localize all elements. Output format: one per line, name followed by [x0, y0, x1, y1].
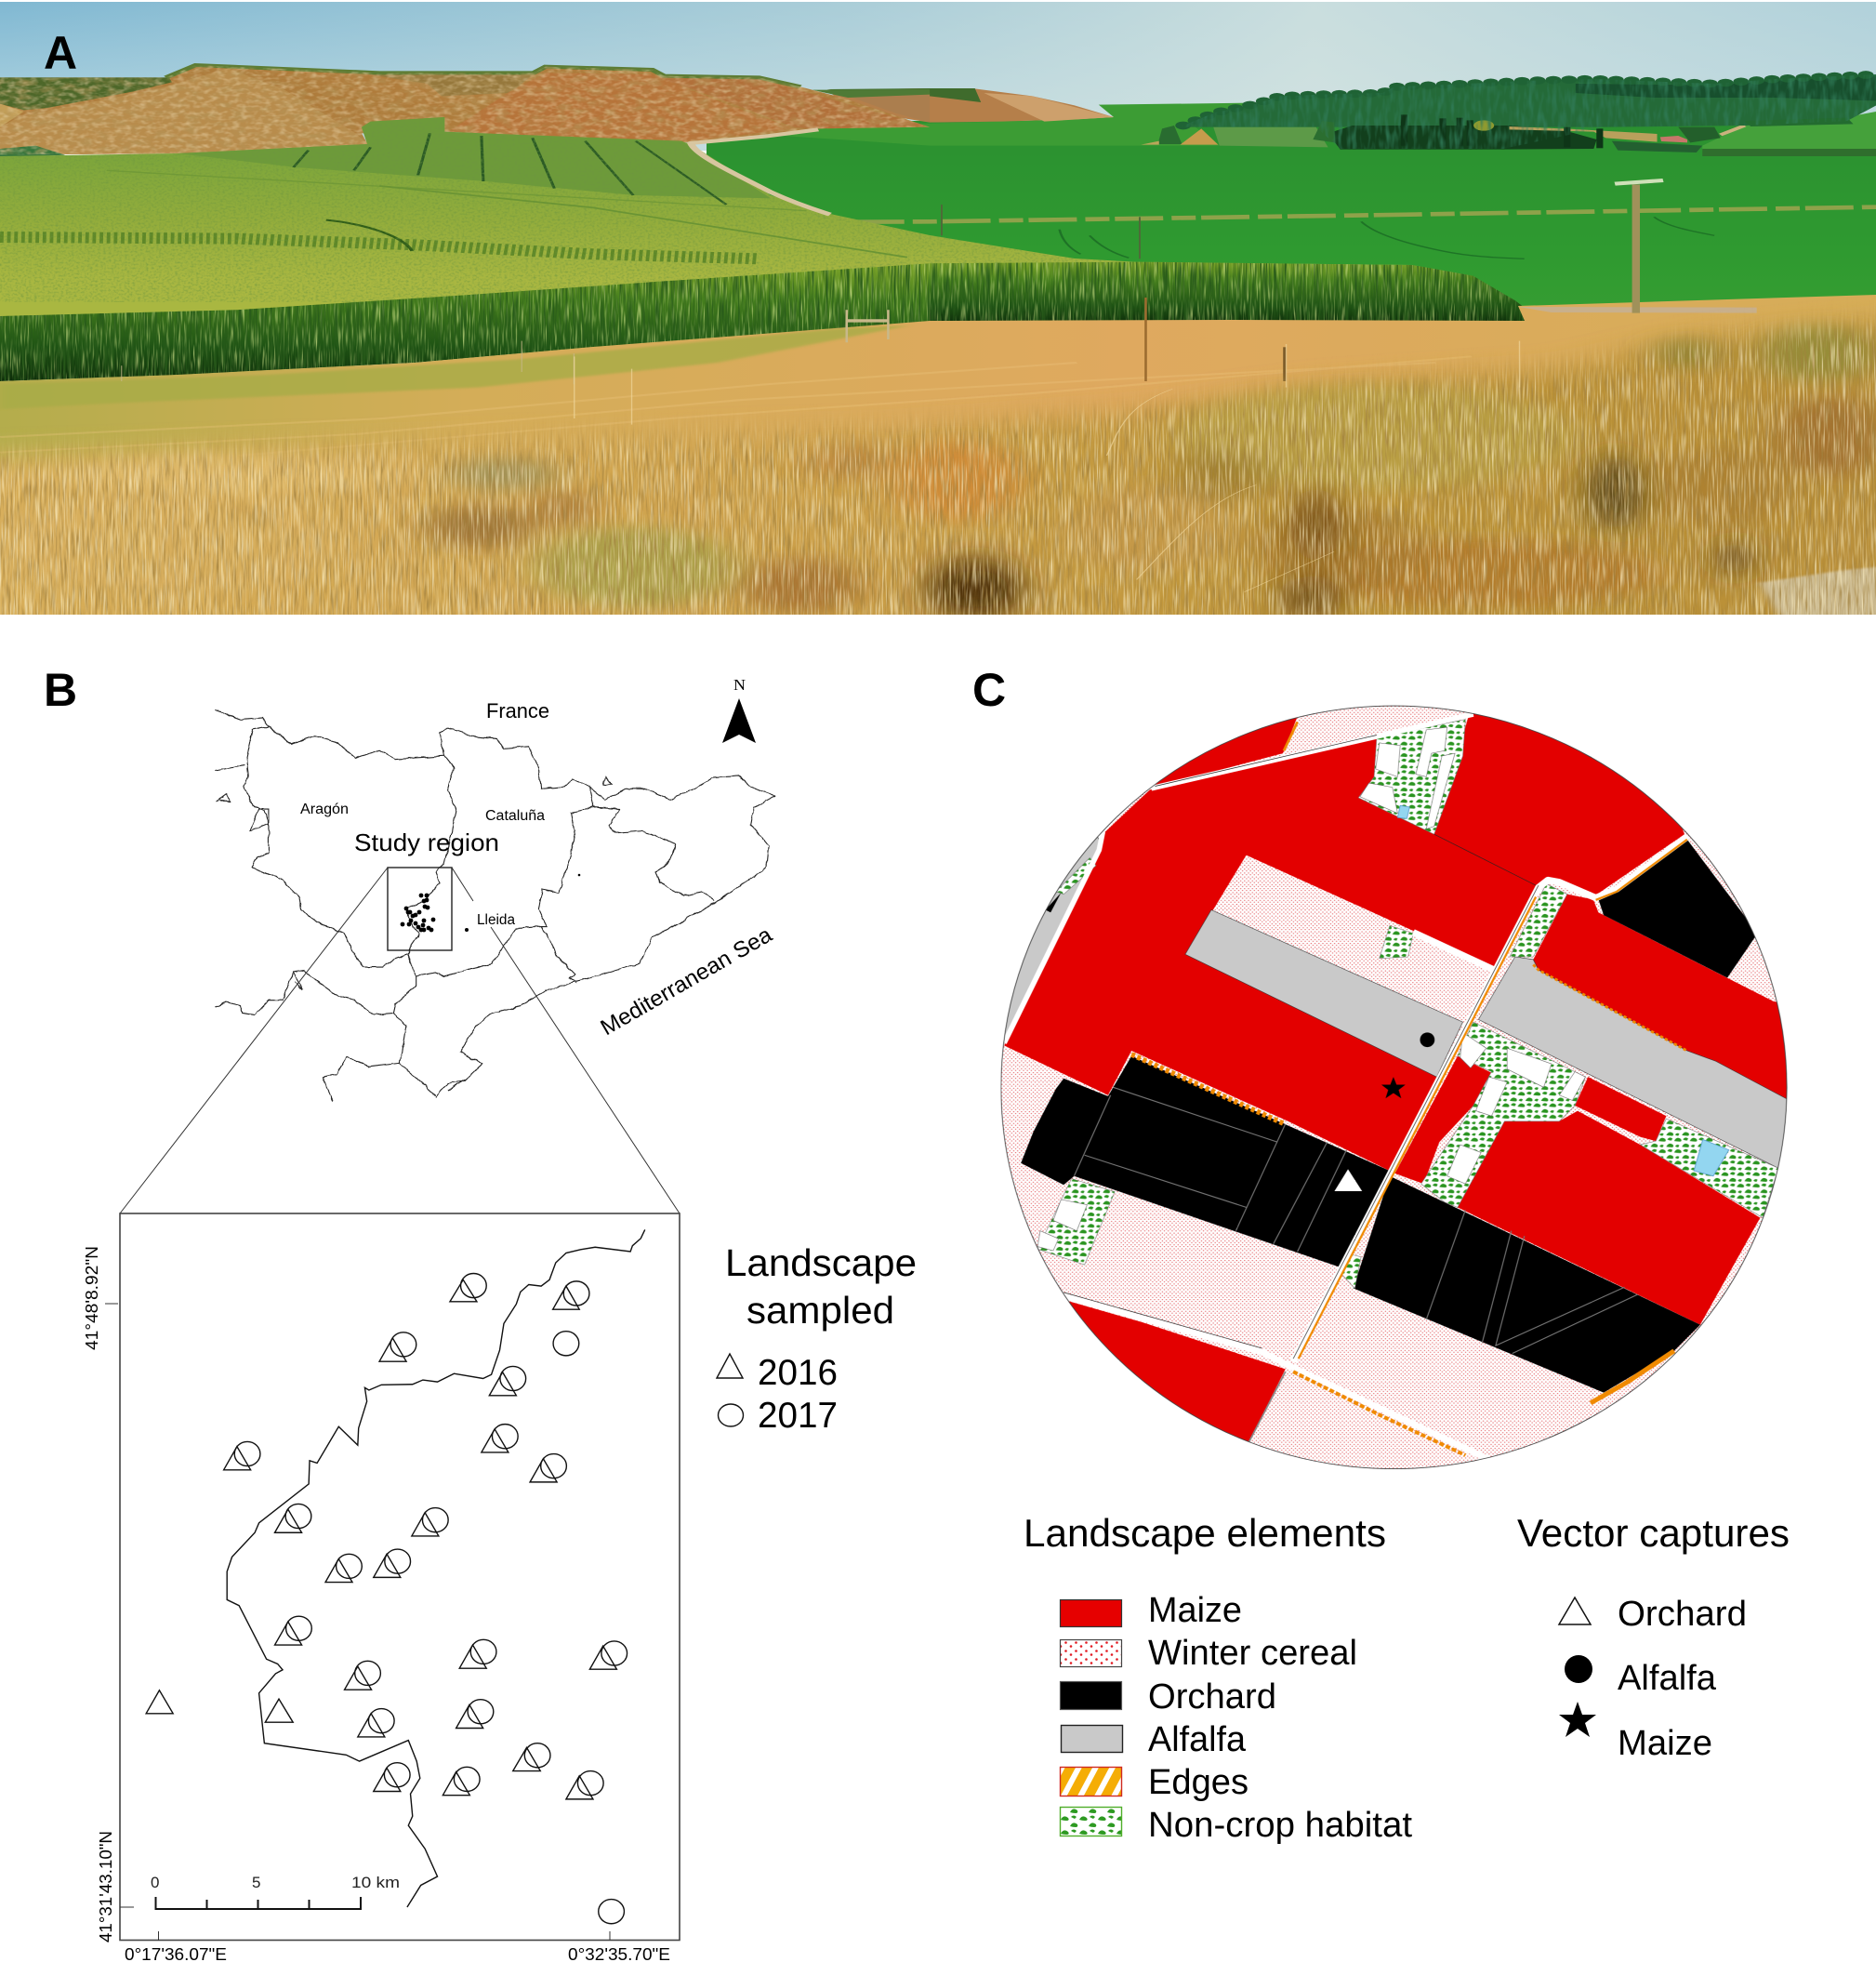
region boundaries: [215, 709, 774, 1101]
dark shade pockets: [925, 456, 1756, 620]
sites sampled both years: [224, 1273, 628, 1799]
distant eroded hill: [827, 88, 1114, 123]
legend: landscape elements: [1024, 1511, 1412, 1845]
scale bar: 0: [151, 1874, 159, 1891]
label Aragon: Aragón: [300, 802, 349, 817]
maize swatch and label: [1060, 1591, 1242, 1630]
north arrow: [722, 676, 756, 743]
buildings and clearings: [1037, 727, 1585, 1251]
legend title: Landscape: [725, 1241, 917, 1284]
forest: [1142, 71, 1876, 152]
edges swatch and label: [1060, 1763, 1248, 1802]
non-crop habitat patches: [1037, 720, 1778, 1288]
panel label A: A: [44, 27, 77, 79]
legend: landscape sampled: [717, 1241, 917, 1436]
panel label C: C: [972, 664, 1006, 716]
north arrow: N: [733, 676, 746, 694]
alfalfa symbol and label: [1565, 1655, 1717, 1698]
alfalfa fields: [996, 837, 1800, 1168]
alfalfa symbol and label: Alfalfa: [1618, 1659, 1717, 1698]
orchard parcel lines: [1074, 1087, 1638, 1354]
legend heading: Vector captures: [1517, 1511, 1790, 1555]
legend: vector captures: [1517, 1511, 1790, 1763]
foreground dry grass: [0, 288, 1876, 667]
latitude label bottom: 41°31'43.10"N: [97, 1831, 115, 1942]
winter cereal swatch and label: Winter cereal: [1148, 1634, 1357, 1673]
panel label B: B: [44, 664, 77, 716]
alfalfa swatch and label: Alfalfa: [1148, 1720, 1247, 1759]
label Study region: Study region: [354, 829, 499, 856]
right-hand slope, hedges and tracks: [857, 112, 1876, 259]
scale bar: 10 km: [351, 1874, 400, 1891]
tone patches: [0, 325, 1876, 614]
non-crop habitat swatch and label: Non-crop habitat: [1148, 1806, 1412, 1845]
gravel verge: [1759, 561, 1876, 623]
edges swatch and label: Edges: [1148, 1763, 1248, 1802]
symbols and boundary in inset: [146, 1229, 645, 1924]
label France: France: [486, 699, 549, 722]
map contents clipped to circle: [985, 688, 1803, 1506]
legend item 2017: [718, 1396, 838, 1436]
green fields on the right: [707, 102, 1876, 306]
label Cataluna: Cataluña: [485, 808, 545, 824]
winter cereal base: [985, 688, 1803, 1506]
utility poles and sign: [122, 180, 1663, 384]
ponds: [1397, 805, 1729, 1176]
maize symbol and label: [1559, 1702, 1712, 1763]
sites sampled in a single year: [146, 1332, 624, 1924]
hill soil texture: [0, 65, 930, 154]
scale bar: [151, 1874, 400, 1909]
legend item 2016: 2016: [758, 1353, 838, 1393]
orchard swatch and label: Orchard: [1148, 1677, 1276, 1717]
orchard fields: [1021, 840, 1758, 1393]
panel A: landscape photograph: [0, 2, 1876, 667]
legend item 2016: [717, 1353, 838, 1393]
sky: [0, 2, 1876, 151]
coordinate ticks: [105, 1304, 610, 1941]
legend heading: Landscape elements: [1024, 1511, 1386, 1555]
far green slope: [786, 102, 1244, 145]
maize symbol and label: Maize: [1618, 1724, 1712, 1763]
legend item 2017: 2017: [758, 1396, 838, 1436]
black corner detail: [1046, 893, 1061, 912]
orchard symbol and label: [1559, 1595, 1747, 1634]
study region box with sites: [388, 868, 580, 950]
panel C: land-use circle map: [985, 688, 1803, 1506]
latitude label top: 41°48'8.92"N: [83, 1246, 101, 1350]
green-tinged left margin: [0, 325, 909, 409]
province boundary: [227, 1229, 645, 1907]
scale bar: 5: [252, 1874, 260, 1891]
maize fields: [1004, 709, 1800, 1442]
maize strip: [0, 262, 1525, 381]
maize swatch and label: Maize: [1148, 1591, 1242, 1630]
label Lleida: Lleida: [477, 912, 515, 928]
legend title: sampled: [746, 1289, 894, 1332]
orchard swatch and label: [1060, 1677, 1276, 1717]
stubble field: [0, 295, 1876, 476]
tall stems: [575, 341, 1519, 592]
field edge margins: [1131, 722, 1687, 1455]
orchard symbol and label: Orchard: [1618, 1595, 1747, 1634]
circle outline: [1001, 706, 1787, 1469]
label Mediterranean Sea: Mediterranean Sea: [597, 921, 777, 1041]
eroded hills: [0, 63, 930, 156]
inset map of sampled landscapes: [83, 1213, 680, 1962]
inset frame: [120, 1213, 680, 1940]
legend title: [725, 1241, 917, 1332]
panel B: regional map: [120, 676, 777, 1213]
capture marker: orchard: [1334, 1169, 1362, 1191]
mown swaths: [0, 356, 1472, 456]
capture marker: alfalfa: [1420, 1032, 1434, 1047]
thin road outlines: [1064, 736, 1539, 1359]
roads: [1004, 714, 1687, 1459]
dirt track: [691, 129, 830, 215]
alfalfa swatch and label: [1062, 1720, 1247, 1759]
zoom connector lines: [120, 868, 680, 1213]
winter cereal boundary lines: [1248, 1372, 1286, 1442]
yellow-green wheat field: [0, 116, 1413, 335]
stalk textures: [0, 262, 1525, 381]
curved rows: [0, 237, 759, 259]
capture marker: maize: [1381, 1077, 1406, 1098]
row-crop block: [0, 117, 907, 259]
field grain: [0, 134, 1125, 302]
tree texture: [1186, 74, 1876, 149]
grass blades: [0, 288, 1876, 615]
